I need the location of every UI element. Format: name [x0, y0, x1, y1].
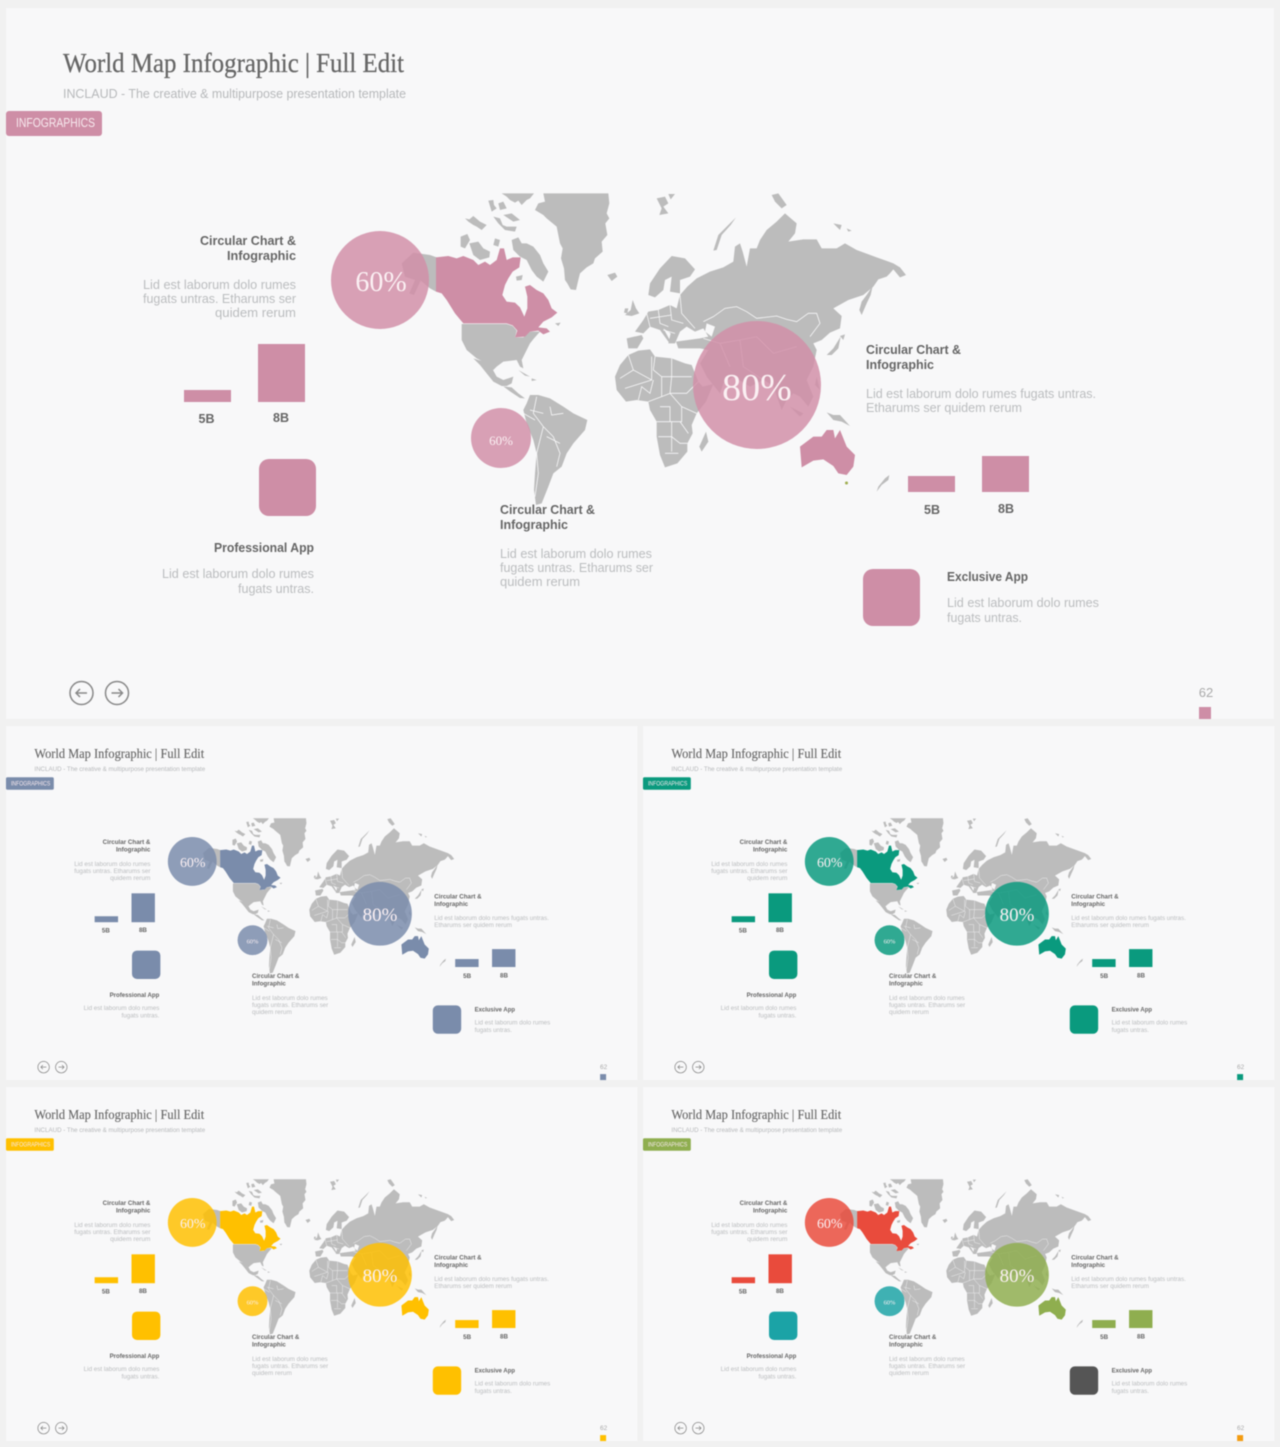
text block: middle circular chart	[889, 973, 966, 1016]
title: World Map Infographic | Full Edit	[63, 48, 404, 78]
slide: blue variant	[6, 726, 637, 1080]
bar chart: left: 5B	[739, 1289, 747, 1296]
text block: middle circular chart: fugats untras. Etharums ser	[252, 1002, 329, 1009]
tag: infographics	[6, 1138, 54, 1151]
bar chart: left	[95, 893, 155, 935]
text block: exclusive app: fugats untras.	[1112, 1027, 1149, 1034]
text block: left circular chart: Infographic	[116, 846, 151, 853]
subtitle: INCLAUD - The creative & multipurpose presentation template	[34, 1127, 206, 1134]
text block: exclusive app	[475, 1006, 550, 1034]
text block: exclusive app: Exclusive App	[1112, 1006, 1152, 1013]
text block: left circular chart: Infographic	[753, 1207, 788, 1214]
circle: 60% Canada: 60%	[180, 1217, 206, 1232]
world map	[203, 1179, 454, 1335]
text block: middle circular chart: fugats untras. Etharums ser	[889, 1002, 966, 1009]
text block: professional app: fugats untras.	[759, 1012, 797, 1019]
text block: professional app: Professional App	[747, 992, 796, 999]
tag: infographics: INFOGRAPHICS	[11, 1141, 50, 1148]
bar chart: right: 8B	[998, 502, 1014, 516]
text block: middle circular chart: Lid est laborum dolo rumes	[889, 995, 965, 1002]
circle: 60% Canada	[805, 1198, 854, 1247]
bar chart: left: 8B	[776, 927, 784, 934]
text block: left circular chart: fugats untras. Etharums ser	[711, 1229, 788, 1236]
bar chart: right	[455, 1310, 515, 1341]
bar chart: right: 8B	[1137, 1333, 1145, 1340]
circle: 60% South America	[471, 408, 531, 468]
text block: right circular chart	[1071, 1254, 1186, 1290]
text block: exclusive app: fugats untras.	[475, 1388, 512, 1395]
text block: professional app: fugats untras.	[238, 581, 314, 596]
text block: left circular chart: quidem rerum	[110, 1236, 150, 1243]
text block: middle circular chart: quidem rerum	[252, 1370, 292, 1377]
text block: right circular chart: Circular Chart &	[1071, 893, 1119, 900]
circle: 60% South America	[875, 1286, 904, 1316]
text block: middle circular chart: quidem rerum	[252, 1009, 292, 1016]
bar chart: left: 5B	[739, 928, 747, 935]
text block: left circular chart: fugats untras. Etharums ser	[711, 868, 788, 875]
subtitle: INCLAUD - The creative & multipurpose presentation template	[63, 86, 406, 101]
text block: left circular chart: quidem rerum	[215, 305, 296, 320]
text block: middle circular chart: quidem rerum	[889, 1009, 929, 1016]
text block: exclusive app: fugats untras.	[947, 610, 1022, 625]
text block: exclusive app	[475, 1367, 550, 1395]
text block: professional app	[84, 992, 160, 1019]
text block: right circular chart: Etharums ser quidem rerum	[434, 1283, 512, 1290]
icon: next arrow	[106, 682, 128, 704]
text block: professional app: Professional App	[110, 1353, 159, 1360]
world map	[840, 818, 1091, 974]
text block: exclusive app: Lid est laborum dolo rumes	[1112, 1019, 1187, 1026]
circle: 60% South America	[238, 925, 267, 955]
icon: next arrow	[693, 1422, 704, 1434]
circle: 60% Canada	[805, 837, 854, 886]
text block: left circular chart: fugats untras. Etharums ser	[74, 1229, 151, 1236]
text block: exclusive app: Lid est laborum dolo rumes	[1112, 1380, 1187, 1387]
text block: middle circular chart: Infographic	[252, 1341, 286, 1348]
circle: 80% Asia: 80%	[363, 1266, 398, 1287]
circle: 80% Asia: 80%	[1000, 1266, 1035, 1287]
text block: professional app: Lid est laborum dolo rumes	[162, 566, 314, 581]
text block: middle circular chart	[500, 502, 654, 589]
circle: 60% South America: 60%	[884, 1300, 896, 1307]
bar chart: right	[1092, 949, 1152, 980]
tag: infographics: INFOGRAPHICS	[648, 780, 687, 787]
circle: 60% Canada: 60%	[180, 856, 206, 871]
bar chart: right: 5B	[463, 1334, 472, 1341]
text block: left circular chart: quidem rerum	[747, 1236, 787, 1243]
circle: 80% Asia	[348, 882, 412, 946]
text block: middle circular chart: Infographic	[889, 1341, 923, 1348]
text block: left circular chart	[143, 233, 297, 320]
text block: professional app: Lid est laborum dolo rumes	[721, 1005, 796, 1012]
text block: exclusive app: Exclusive App	[475, 1006, 515, 1013]
text block: professional app: fugats untras.	[122, 1373, 160, 1380]
page number	[1237, 1425, 1245, 1441]
bar chart: right: 8B	[500, 972, 508, 979]
text block: exclusive app: Lid est laborum dolo rumes	[475, 1019, 550, 1026]
bar chart: left	[95, 1254, 155, 1296]
circle: 60% Canada: 60%	[355, 267, 407, 298]
text block: professional app: Lid est laborum dolo rumes	[84, 1366, 159, 1373]
subtitle: INCLAUD - The creative & multipurpose presentation template	[671, 766, 843, 773]
bar chart: left: 8B	[776, 1288, 784, 1295]
circle: 80% Asia: 80%	[363, 905, 398, 926]
text block: right circular chart: Infographic	[1071, 901, 1106, 908]
text block: exclusive app: fugats untras.	[475, 1027, 512, 1034]
bar chart: right: 5B	[463, 973, 472, 980]
icon: previous arrow	[675, 1061, 686, 1073]
text block: right circular chart: Circular Chart &	[866, 342, 961, 357]
text block: middle circular chart: Lid est laborum dolo rumes	[252, 1356, 328, 1363]
text block: middle circular chart: Infographic	[500, 517, 568, 532]
bar chart: right: 5B	[1100, 1334, 1109, 1341]
text block: middle circular chart: Circular Chart &	[252, 973, 300, 980]
slide: multicolour variant	[643, 1087, 1274, 1441]
icon: previous arrow	[38, 1422, 49, 1434]
text block: middle circular chart	[252, 973, 329, 1016]
circle: 80% Asia	[985, 1243, 1049, 1307]
tag: infographics	[643, 1138, 691, 1151]
text block: middle circular chart: Circular Chart &	[500, 502, 595, 517]
title: World Map Infographic | Full Edit	[34, 1107, 204, 1122]
text block: right circular chart: Etharums ser quidem rerum	[866, 400, 1022, 415]
circle: 60% Canada	[168, 1198, 217, 1247]
slide: pink main	[6, 8, 1274, 719]
text block: professional app: Lid est laborum dolo rumes	[84, 1005, 159, 1012]
text block: right circular chart: Etharums ser quidem rerum	[1071, 1283, 1149, 1290]
text block: right circular chart: Circular Chart &	[434, 1254, 482, 1261]
text block: right circular chart: Lid est laborum dolo rumes fugats untras.	[866, 386, 1096, 401]
circle: 80% Asia	[348, 1243, 412, 1307]
slide: yellow variant	[6, 1087, 637, 1441]
text block: middle circular chart: quidem rerum	[500, 574, 580, 589]
text block: professional app: Lid est laborum dolo rumes	[721, 1366, 796, 1373]
text block: middle circular chart: Lid est laborum dolo rumes	[252, 995, 328, 1002]
title: World Map Infographic | Full Edit	[34, 746, 204, 761]
circle: 60% South America	[875, 925, 904, 955]
bar chart: left	[184, 344, 305, 426]
text block: middle circular chart: Circular Chart &	[889, 1334, 937, 1341]
icon: next arrow	[693, 1061, 704, 1073]
text block: right circular chart: Infographic	[434, 901, 469, 908]
text block: middle circular chart	[889, 1334, 966, 1377]
bar chart: right	[908, 456, 1029, 517]
text block: professional app	[84, 1353, 160, 1380]
text block: middle circular chart: Lid est laborum dolo rumes	[500, 546, 652, 561]
icon: professional app square	[132, 1312, 160, 1340]
text block: left circular chart: Circular Chart &	[103, 839, 151, 846]
bar chart: left	[732, 893, 792, 935]
text block: exclusive app: Exclusive App	[947, 569, 1028, 584]
text block: left circular chart: Infographic	[227, 248, 296, 263]
bar chart: left: 8B	[139, 1288, 147, 1295]
tag: infographics: INFOGRAPHICS	[16, 116, 95, 130]
text block: right circular chart: Circular Chart &	[1071, 1254, 1119, 1261]
icon: exclusive app square	[433, 1005, 461, 1034]
title: World Map Infographic | Full Edit	[671, 746, 841, 761]
text block: left circular chart: Lid est laborum dolo rumes	[74, 1222, 150, 1229]
text block: right circular chart: Infographic	[866, 357, 934, 372]
icon: professional app square	[769, 951, 797, 979]
bar chart: right: 8B	[500, 1333, 508, 1340]
text block: right circular chart: Circular Chart &	[434, 893, 482, 900]
text block: left circular chart: Lid est laborum dolo rumes	[711, 1222, 787, 1229]
page number: 62	[1237, 1064, 1245, 1071]
tag: infographics	[6, 777, 54, 790]
text block: exclusive app: Exclusive App	[475, 1367, 515, 1374]
circle: 80% Asia	[985, 882, 1049, 946]
bar chart: left: 5B	[102, 1289, 110, 1296]
page number: 62	[600, 1425, 608, 1432]
text block: right circular chart	[866, 342, 1096, 415]
text block: left circular chart	[711, 1200, 788, 1243]
text block: middle circular chart: Circular Chart &	[252, 1334, 300, 1341]
circle: 60% South America	[238, 1286, 267, 1316]
text block: left circular chart	[711, 839, 788, 882]
text block: professional app	[721, 1353, 797, 1380]
world map	[203, 818, 454, 974]
page number: 62	[600, 1064, 608, 1071]
circle: 80% Asia: 80%	[722, 367, 792, 409]
text block: middle circular chart: fugats untras. Etharums ser	[889, 1363, 966, 1370]
text block: left circular chart: quidem rerum	[747, 875, 787, 882]
text block: left circular chart: Circular Chart &	[740, 1200, 788, 1207]
text block: professional app: fugats untras.	[759, 1373, 797, 1380]
text block: exclusive app: Exclusive App	[1112, 1367, 1152, 1374]
text block: exclusive app: Lid est laborum dolo rumes	[947, 595, 1099, 610]
page number: 62	[1237, 1425, 1245, 1432]
text block: professional app	[162, 540, 314, 596]
circle: 80% Asia: 80%	[1000, 905, 1035, 926]
text block: right circular chart	[1071, 893, 1186, 929]
text block: left circular chart: Circular Chart &	[200, 233, 296, 248]
text block: left circular chart	[74, 1200, 151, 1243]
page number	[600, 1064, 608, 1080]
text block: right circular chart: Infographic	[434, 1262, 469, 1269]
text block: middle circular chart: Infographic	[889, 980, 923, 987]
text block: professional app	[721, 992, 797, 1019]
text block: right circular chart: Infographic	[1071, 1262, 1106, 1269]
bar chart: right	[1092, 1310, 1152, 1341]
icon: exclusive app square	[863, 569, 920, 626]
text block: left circular chart: Lid est laborum dolo rumes	[711, 861, 787, 868]
icon: professional app square	[769, 1312, 797, 1340]
icon: professional app square	[132, 951, 160, 979]
page number	[1199, 685, 1213, 719]
world map	[840, 1179, 1091, 1335]
text block: left circular chart: Infographic	[753, 846, 788, 853]
bar chart: right	[455, 949, 515, 980]
icon: exclusive app square	[433, 1366, 461, 1395]
icon: professional app square	[259, 459, 316, 516]
bar chart: left	[732, 1254, 792, 1296]
circle: 80% Asia	[693, 321, 821, 449]
icon: previous arrow	[38, 1061, 49, 1073]
tag: infographics: INFOGRAPHICS	[648, 1141, 687, 1148]
text block: right circular chart: Etharums ser quidem rerum	[434, 922, 512, 929]
text block: right circular chart	[434, 1254, 549, 1290]
icon: next arrow	[56, 1422, 67, 1434]
text block: left circular chart: Circular Chart &	[103, 1200, 151, 1207]
bar chart: left: 5B	[199, 412, 214, 426]
bar chart: right: 8B	[1137, 972, 1145, 979]
circle: 60% Canada: 60%	[817, 1217, 843, 1232]
text block: right circular chart	[434, 893, 549, 929]
bar chart: left: 5B	[102, 928, 110, 935]
text block: professional app: Professional App	[747, 1353, 796, 1360]
bar chart: right: 5B	[1100, 973, 1109, 980]
tag: infographics: INFOGRAPHICS	[11, 780, 50, 787]
text block: left circular chart: fugats untras. Etharums ser	[74, 868, 151, 875]
page number	[1237, 1064, 1245, 1080]
subtitle: INCLAUD - The creative & multipurpose presentation template	[671, 1127, 843, 1134]
tag: infographics	[6, 111, 102, 136]
text block: middle circular chart: fugats untras. Etharums ser	[500, 560, 654, 575]
text block: middle circular chart: Infographic	[252, 980, 286, 987]
text block: middle circular chart: quidem rerum	[889, 1370, 929, 1377]
circle: 60% South America: 60%	[884, 939, 896, 946]
text block: right circular chart: Lid est laborum dolo rumes fugats untras.	[434, 915, 549, 922]
text block: middle circular chart: Circular Chart &	[889, 973, 937, 980]
icon: previous arrow	[70, 682, 93, 704]
text block: exclusive app	[1112, 1006, 1187, 1034]
circle: 60% Canada	[331, 231, 429, 329]
subtitle: INCLAUD - The creative & multipurpose presentation template	[34, 766, 206, 773]
text block: professional app: Professional App	[214, 540, 314, 555]
text block: left circular chart	[74, 839, 151, 882]
bar chart: right: 5B	[924, 503, 940, 517]
icon: exclusive app square	[1070, 1005, 1098, 1034]
text block: right circular chart: Lid est laborum dolo rumes fugats untras.	[1071, 1276, 1186, 1283]
text block: exclusive app: Lid est laborum dolo rumes	[475, 1380, 550, 1387]
text block: middle circular chart: fugats untras. Etharums ser	[252, 1363, 329, 1370]
slide: green variant	[643, 726, 1274, 1080]
text block: left circular chart: Infographic	[116, 1207, 151, 1214]
text block: right circular chart: Etharums ser quidem rerum	[1071, 922, 1149, 929]
circle: 60% South America: 60%	[247, 939, 259, 946]
text block: exclusive app	[1112, 1367, 1187, 1395]
page number: 62	[1199, 685, 1213, 700]
text block: left circular chart: Lid est laborum dolo rumes	[74, 861, 150, 868]
circle: 60% Canada: 60%	[817, 856, 843, 871]
text block: right circular chart: Lid est laborum dolo rumes fugats untras.	[434, 1276, 549, 1283]
text block: professional app: Professional App	[110, 992, 159, 999]
page number	[600, 1425, 608, 1441]
circle: 60% Canada	[168, 837, 217, 886]
text block: left circular chart: Lid est laborum dolo rumes	[143, 277, 296, 292]
icon: previous arrow	[675, 1422, 686, 1434]
bar chart: left: 8B	[139, 927, 147, 934]
circle: 60% South America: 60%	[489, 433, 513, 448]
text block: left circular chart: fugats untras. Etharums ser	[143, 291, 297, 306]
text block: left circular chart: quidem rerum	[110, 875, 150, 882]
icon: next arrow	[56, 1061, 67, 1073]
world map	[402, 193, 906, 505]
bar chart: left: 8B	[273, 411, 289, 425]
text block: middle circular chart	[252, 1334, 329, 1377]
text block: exclusive app: fugats untras.	[1112, 1388, 1149, 1395]
tag: infographics	[643, 777, 691, 790]
text block: professional app: fugats untras.	[122, 1012, 160, 1019]
text block: exclusive app	[947, 569, 1099, 625]
text block: middle circular chart: Lid est laborum dolo rumes	[889, 1356, 965, 1363]
text block: left circular chart: Circular Chart &	[740, 839, 788, 846]
text block: right circular chart: Lid est laborum dolo rumes fugats untras.	[1071, 915, 1186, 922]
icon: exclusive app square	[1070, 1366, 1098, 1395]
circle: 60% South America: 60%	[247, 1300, 259, 1307]
title: World Map Infographic | Full Edit	[671, 1107, 841, 1122]
